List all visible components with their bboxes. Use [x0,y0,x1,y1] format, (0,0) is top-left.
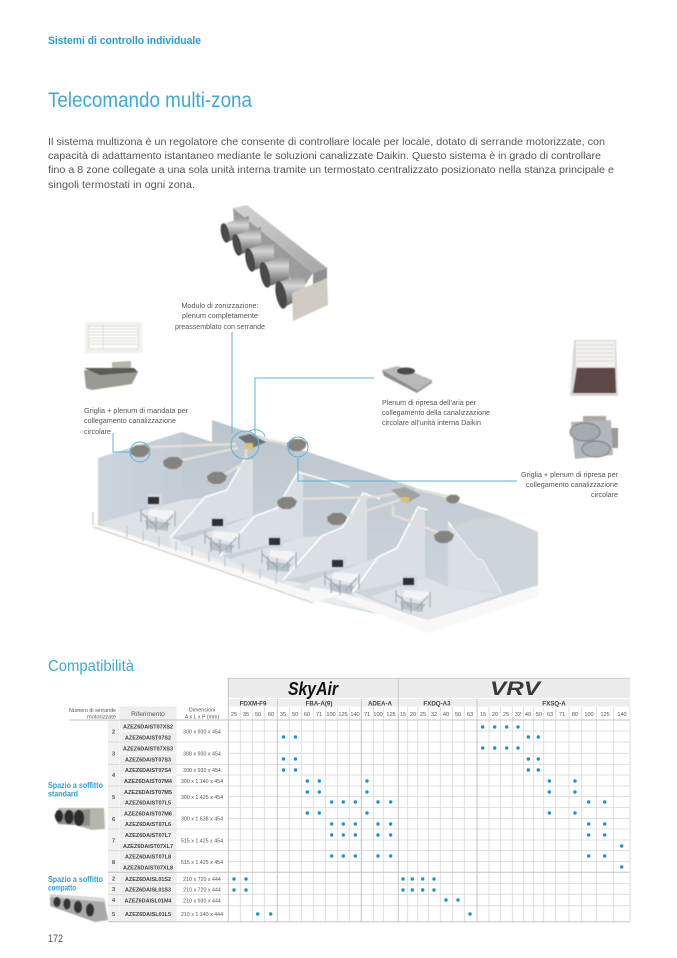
reference codes: AZEZ6DAIST07L8 [125,854,171,860]
damper counts: 2 [112,730,115,736]
room floors [98,498,203,550]
label: zoning module: Modulo di zonizzazione: [182,301,258,310]
model name row [228,699,630,707]
reference codes: AZEZ6DAIST07XS3 [123,746,173,752]
capacity numbers: 71 [559,712,565,718]
standard unit image [54,808,105,830]
reference codes: AZEZ6DAIST07L7 [125,833,171,839]
compatibility dots [232,725,623,916]
partition 4 [353,507,425,592]
damper counts [112,730,116,918]
capacity numbers: 25 [231,712,237,718]
capacity numbers: 125 [338,712,348,718]
front ledge [93,522,538,633]
model name row: FDXM-F9 [240,700,267,707]
reference codes: AZEZ6DAIST07XS2 [123,724,173,730]
logo: VRV: VRV [490,679,542,700]
capacity numbers: 32 [515,712,521,718]
damper counts: 3 [112,887,115,893]
model name row: ADEA-A [368,700,393,707]
capacity numbers: 32 [431,712,437,718]
module units [238,434,266,448]
right wall [452,517,538,593]
damper counts: 4 [112,773,116,779]
reference codes: AZEZ6DAIST07S2 [125,736,171,742]
capacity numbers: 80 [572,712,578,718]
capacity numbers: 20 [410,712,416,718]
capacity numbers: 35 [243,712,249,718]
label: return grille and plenum: Griglia + plenum di ripresa per [521,470,618,479]
label: return grille and plenum: collegamento canalizzazione [526,480,618,489]
brand header band [228,678,630,698]
capacity numbers: 20 [492,712,498,718]
dimensions: 210 x 720 x 444 [183,877,221,883]
blue leader lines and circles [113,332,517,481]
capacity numbers: 40 [443,712,449,718]
reference codes: AZEZ6DAIST07L5 [125,800,171,806]
damper counts: 5 [112,912,115,918]
reference codes: AZEZ6DAISL01M4 [124,898,172,904]
label: compact ceiling space [48,875,103,892]
capacity numbers: 25 [420,712,426,718]
label: supply grille and plenum: Griglia + plenum di mandata per [84,406,188,415]
page number: 172 [48,933,63,945]
dimensions: 300 x 1.425 x 454 [181,795,223,801]
capacity numbers: 100 [326,712,336,718]
damper counts: 2 [112,876,115,882]
left column headers: motorizzate [87,714,116,720]
left column headers: A x L x P (mm) [185,714,219,720]
damper counts: 4 [112,898,116,904]
reference codes: AZEZ6DAISL01S3 [125,888,171,894]
label: compact ceiling space: Spazio a soffitto [48,875,103,884]
supply grille product image [85,322,142,353]
label: zoning module: preassemblato con serrande [175,322,265,331]
intro text block: singoli termostati in ogni zona. [48,180,195,191]
label: supply grille and plenum: collegamento canalizzazione [84,416,176,425]
dimensions: 300 x 930 x 454 [183,730,221,736]
capacity numbers: 125 [386,712,396,718]
capacity numbers: 60 [304,712,310,718]
dimensions: 300 x 930 x 454 [183,768,221,774]
reference codes: AZEZ6DAIST07M6 [124,812,172,818]
capacity numbers: 25 [503,712,509,718]
left column headers [69,706,219,720]
label: return plenum: collegamento della canalizzazione [382,408,490,417]
label: standard ceiling space [48,781,103,798]
dimensions: 515 x 1.425 x 454 [181,860,223,866]
damper counts: 6 [112,817,115,823]
damper counts: 8 [112,860,115,866]
label: return plenum: circolare all’unità interna Daikin [382,418,481,427]
capacity numbers: 35 [280,712,286,718]
partition 1 [170,458,253,538]
damper counts: 5 [112,795,115,801]
section header: Sistemi di controllo individuale [48,35,201,47]
model name row: FXDQ-A3 [423,700,451,707]
compact unit image [50,894,108,922]
partition 3 [283,493,367,580]
label: compact ceiling space: compatto [48,884,76,892]
reference codes: AZEZ6DAISL01L5 [125,912,171,918]
left column headers: Dimensioni [189,708,215,714]
label: standard ceiling space: Spazio a soffitto [48,781,103,790]
heading: compatibility: Compatibilità [48,658,134,675]
left column headers: Riferimento [131,711,165,718]
label: return plenum: Plenum di ripresa dell’aria per [382,398,476,407]
return grille product image [570,340,618,396]
capacity numbers: 50 [455,712,461,718]
capacity numbers: 140 [350,712,360,718]
dimensions: 300 x 1.140 x 454 [181,779,223,785]
capacity numbers: 71 [316,712,322,718]
capacity numbers: 50 [536,712,542,718]
dimensions: 210 x 1.140 x 444 [181,912,223,918]
desks [141,494,176,532]
capacity numbers: 63 [467,712,473,718]
dimensions: 210 x 720 x 444 [183,888,221,894]
label: zoning module: plenum completamente [182,311,258,320]
grid lines [69,678,630,922]
reference codes: AZEZ6DAIST07XL7 [123,844,173,850]
label: supply grille and plenum [84,406,188,436]
reference codes: AZEZ6DAIST07XL8 [123,866,173,872]
intro text block [48,137,614,191]
capacity numbers: 15 [400,712,406,718]
capacity numbers: 50 [255,712,261,718]
dimensions: 300 x 1.638 x 454 [181,816,223,822]
model name row: FBA-A(9) [306,700,332,707]
ducts [150,438,450,533]
floor plan 3D scene [93,420,538,633]
capacity numbers: 125 [600,712,610,718]
ceiling units [130,445,150,457]
capacity numbers: 50 [292,712,298,718]
room 1 left wall [98,432,182,525]
front floor strip [98,525,428,622]
reference codes: AZEZ6DAIST07L6 [125,822,171,828]
return plenum box product image [570,416,618,459]
capacity numbers: 100 [373,712,383,718]
capacity numbers: 40 [525,712,531,718]
capacity numbers: 15 [480,712,486,718]
capacity numbers: 60 [268,712,274,718]
intro text block: fino a 8 zone collegate a una sola unità interna tramite un termostato centralizzato posizionato nella stanza principale e [48,165,614,176]
label: return grille and plenum: circolare [591,490,618,499]
partition 5 [448,522,502,593]
dimensions: 515 x 1.425 x 454 [181,838,223,844]
dimensions [181,730,223,918]
capacity numbers: 140 [617,712,627,718]
label: return grille and plenum [521,470,618,499]
label: return plenum [382,398,490,427]
partition 2 [220,472,303,556]
label: supply grille and plenum: circolare [84,427,111,436]
intro text block: capacità di adattamento istantaneo mediante le soluzioni canalizzate Daikin. Questo sistema è in grado di controllare [48,151,601,162]
label: zoning module [175,301,265,331]
reference codes [123,724,173,918]
reference cell backgrounds [120,720,176,922]
capacity numbers: 63 [547,712,553,718]
dimensions: 300 x 930 x 454 [183,752,221,758]
left column headers: Numero di serrande [69,708,116,714]
label: standard ceiling space: standard [48,790,78,798]
supply plenum product image [84,361,138,390]
title: Telecomando multi-zona [48,89,252,112]
reference codes: AZEZ6DAIST07S4 [125,768,172,774]
dimensions: 210 x 930 x 444 [183,898,221,904]
logo: SkyAir: SkyAir [288,679,339,699]
reference codes: AZEZ6DAIST07S3 [125,758,171,764]
rail posts [93,512,276,584]
intro text block: Il sistema multizona è un regolatore che consente di controllare locale per locale, dotato di serrande motorizzate, con [48,137,605,148]
zoning module product image [220,205,328,321]
damper counts: 7 [112,838,115,844]
capacity numbers: 100 [584,712,594,718]
reference codes: AZEZ6DAIST07M4 [124,779,173,785]
reference codes: AZEZ6DAISL01S2 [125,877,171,883]
capacity numbers: 71 [364,712,370,718]
return plenum product image [382,366,432,393]
damper counts: 3 [112,752,115,758]
capacity numbers [231,712,627,718]
back walls [98,420,538,625]
reference codes: AZEZ6DAIST07M5 [124,790,172,796]
model name row: FXSQ-A [542,700,566,707]
compatibility table [69,678,630,922]
